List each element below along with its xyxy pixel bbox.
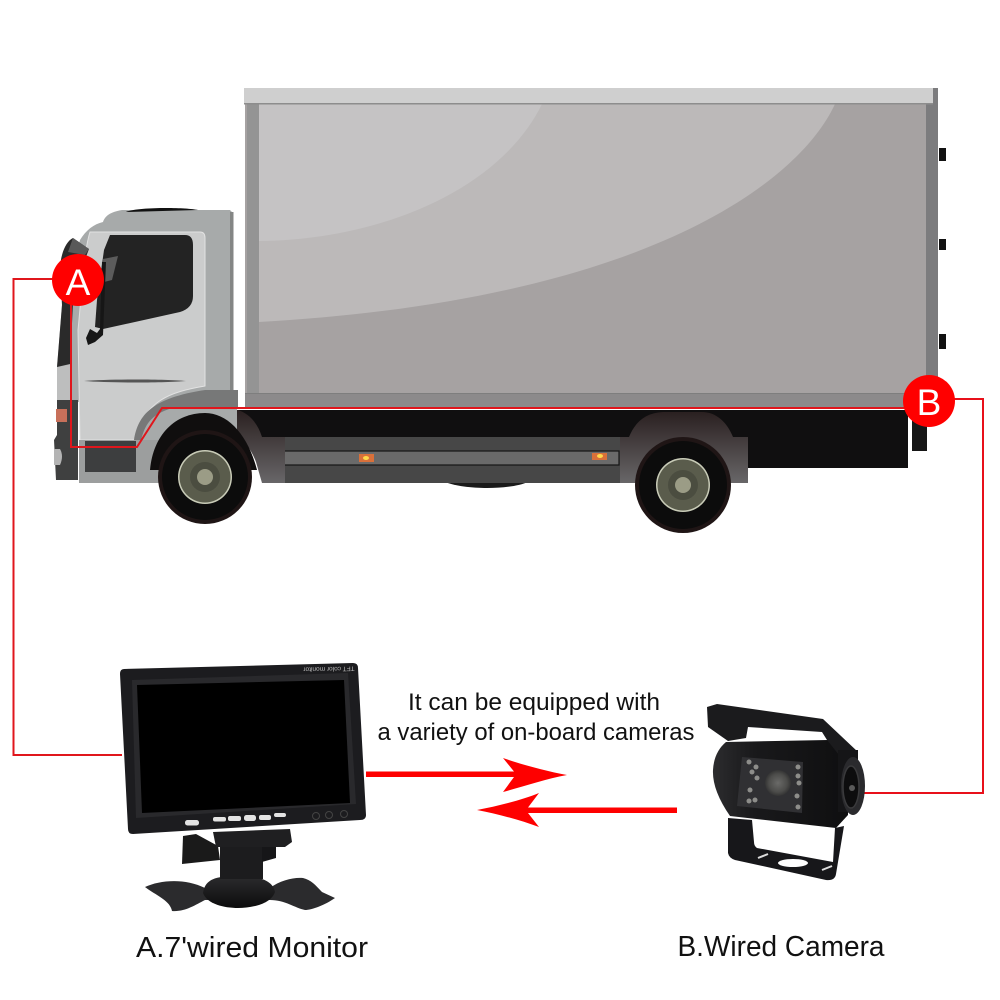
camera face	[737, 757, 803, 813]
camera hood	[707, 704, 858, 800]
camera	[707, 704, 865, 880]
rear wheel	[635, 437, 731, 533]
bumper	[54, 400, 78, 480]
caption: a variety of on-board cameras	[378, 719, 694, 746]
side skirt	[284, 437, 621, 488]
rear fender	[620, 412, 748, 483]
camera lens	[765, 770, 791, 796]
wing mirror	[103, 256, 118, 282]
caption	[378, 689, 694, 746]
wiring route A	[14, 279, 910, 755]
label: monitor: A.7'wired Monitor	[136, 932, 368, 964]
label: camera: B.Wired Camera	[678, 931, 885, 963]
step panel	[79, 440, 161, 483]
marker A: A	[66, 262, 91, 303]
infrared LEDs	[746, 760, 802, 810]
caption: It can be equipped with	[408, 689, 660, 716]
marker A	[52, 254, 104, 306]
cargo box	[244, 88, 946, 409]
chassis	[237, 410, 908, 468]
marker B: B	[917, 382, 941, 423]
cab	[54, 208, 257, 483]
window	[95, 235, 193, 329]
camera side mount	[841, 757, 865, 815]
monitor stand	[145, 829, 335, 911]
front wheel	[158, 430, 252, 524]
truck	[54, 88, 946, 533]
monitor	[120, 663, 366, 911]
monitor frame	[120, 663, 366, 834]
camera body	[713, 740, 848, 828]
wiring route B	[862, 399, 983, 793]
front fender	[195, 410, 285, 483]
camera bracket	[728, 818, 844, 880]
monitor model label: TFT color monitor	[303, 665, 355, 672]
arrow: monitor to camera	[366, 758, 567, 792]
monitor buttons	[185, 813, 286, 826]
marker B	[903, 375, 955, 427]
screen	[137, 680, 350, 813]
arrow: camera to monitor	[477, 793, 677, 827]
